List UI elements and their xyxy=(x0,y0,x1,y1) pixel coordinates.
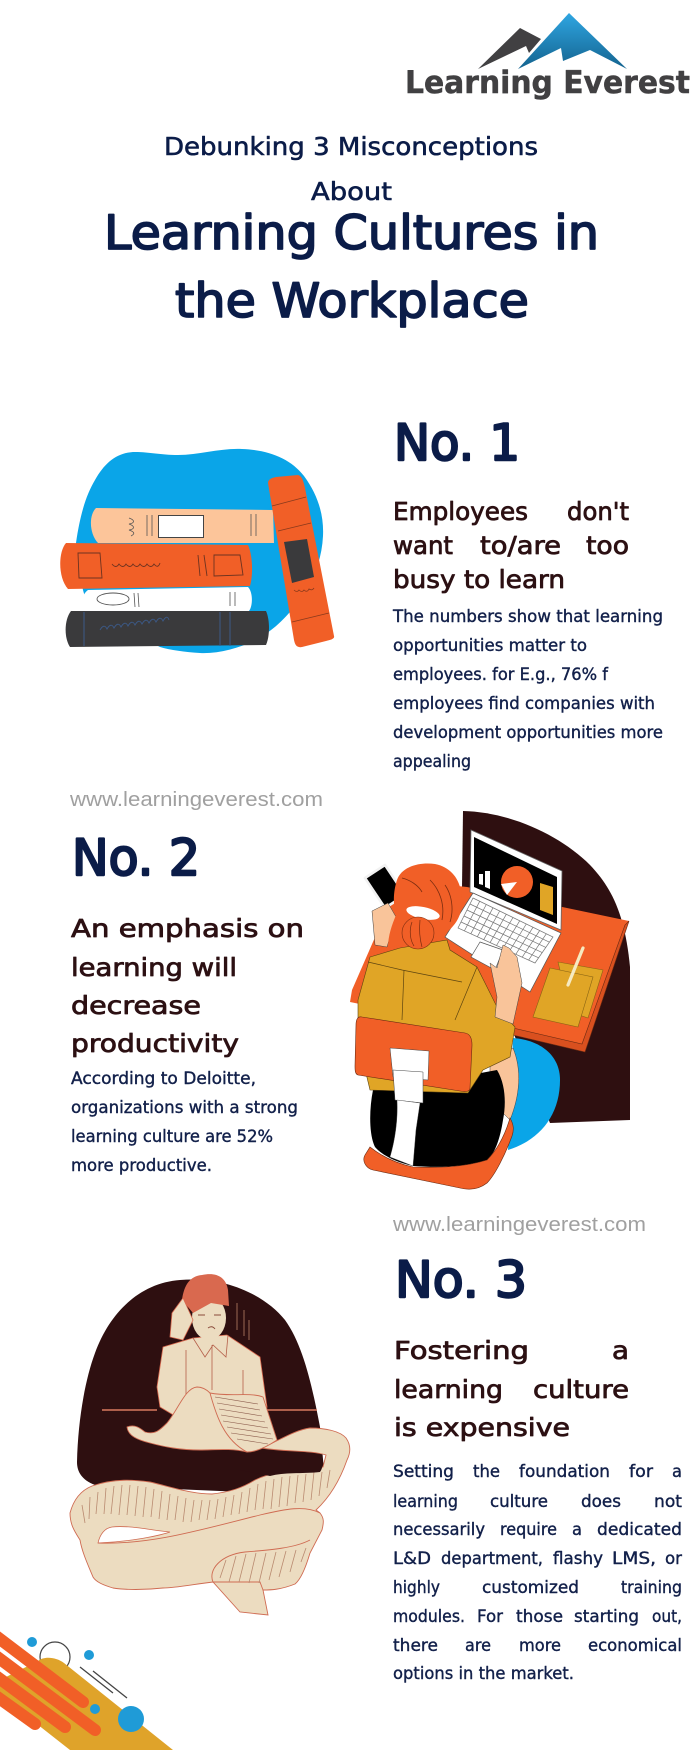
body text 3: require xyxy=(500,1520,557,1540)
body text 2: more productive. xyxy=(71,1156,212,1176)
misconception 3 xyxy=(394,1336,629,1442)
left hand xyxy=(372,903,396,947)
body text 3: learning xyxy=(393,1492,458,1512)
orange stripes xyxy=(0,1636,95,1730)
heading: No. 2: No. 2 xyxy=(72,829,200,887)
body text 1: appealing xyxy=(393,752,471,772)
chair back xyxy=(355,1017,472,1092)
scroll: back band and tail xyxy=(70,1428,350,1615)
body text 3: foundation xyxy=(519,1462,610,1482)
icon: grey mountain xyxy=(478,28,541,69)
leaning orange book xyxy=(268,475,334,647)
website url 2: www.learningeverest.com xyxy=(392,1214,646,1236)
peach book xyxy=(91,508,274,543)
misconception 3: a xyxy=(612,1336,629,1365)
blue blob xyxy=(76,449,323,653)
body text 3: out, xyxy=(652,1607,682,1627)
subtitle line 2: About xyxy=(311,177,392,206)
body text 3: For xyxy=(477,1607,503,1627)
misconception 1: too xyxy=(586,531,629,560)
keyboard grid xyxy=(458,898,553,963)
blue circle xyxy=(508,1038,560,1150)
dark parallel lines xyxy=(80,1667,127,1698)
misconception 3: is expensive xyxy=(394,1413,570,1442)
body text 2: According to Deloitte, xyxy=(71,1069,256,1089)
misconception 3: Fostering xyxy=(394,1336,529,1365)
desk xyxy=(350,880,629,1052)
hair xyxy=(182,1274,229,1313)
jacket xyxy=(358,940,515,1093)
body text 3: are xyxy=(465,1636,491,1656)
body text 1: employees. for E.g., 76% f xyxy=(393,665,609,685)
body text 3: Setting xyxy=(393,1462,454,1482)
main title line 2: the Workplace xyxy=(175,274,529,329)
body text 3: L&D xyxy=(393,1549,431,1569)
title block xyxy=(104,132,599,329)
hair xyxy=(388,864,462,949)
dark book xyxy=(66,611,269,647)
misconception 3: learning xyxy=(394,1375,503,1404)
body text 3: does xyxy=(581,1492,621,1512)
subtitle line 1: Debunking 3 Misconceptions xyxy=(164,132,538,161)
body text 3: more xyxy=(519,1636,561,1656)
misconception 2: learning will xyxy=(71,953,237,982)
jacket seams xyxy=(368,962,477,1020)
decoration: bottom-left abstract shapes xyxy=(0,1636,173,1750)
misconception 2: decrease xyxy=(71,991,201,1020)
body text 1: opportunities matter to xyxy=(393,636,587,656)
dark leg shape xyxy=(240,1452,322,1476)
body text 3: department, xyxy=(441,1549,543,1569)
heading: No. 1: No. 1 xyxy=(394,414,520,472)
section 2 text xyxy=(71,829,304,1176)
illustration: woman at laptop xyxy=(350,811,630,1189)
body text 1: employees find companies with xyxy=(393,694,655,714)
body text 3: the xyxy=(473,1462,500,1482)
logo: Learning Everest xyxy=(405,13,690,101)
white gap in scroll xyxy=(98,1527,170,1543)
body text 3: culture xyxy=(490,1492,548,1512)
body text 3: starting xyxy=(574,1607,639,1627)
chair seat xyxy=(364,1118,513,1189)
misconception 1 xyxy=(393,497,629,594)
misconception 1: busy to learn xyxy=(393,565,565,594)
body text 3: or xyxy=(665,1549,682,1569)
trackpad xyxy=(471,942,503,970)
misconception 2: An emphasis on xyxy=(71,914,304,943)
illustration: man with long paper scroll xyxy=(70,1274,350,1615)
misconception 2 xyxy=(71,914,304,1058)
misconception 1: to/are xyxy=(480,531,561,560)
body text 3: options in the market. xyxy=(393,1664,574,1684)
website url 1: www.learningeverest.com xyxy=(69,789,323,811)
face xyxy=(192,1296,226,1340)
skin of leg xyxy=(490,1048,519,1120)
shirt xyxy=(157,1335,267,1425)
body text 3: customized xyxy=(482,1578,579,1598)
body text 3: highly xyxy=(393,1578,440,1598)
body text 3: for xyxy=(629,1462,653,1482)
section 1 text xyxy=(392,414,663,772)
main title line 1: Learning Cultures in xyxy=(104,206,599,261)
body text 3: not xyxy=(654,1492,682,1512)
section 3 text xyxy=(393,1251,682,1684)
body text 3: dedicated xyxy=(597,1520,682,1540)
horizon lines xyxy=(102,1409,317,1411)
facial features xyxy=(198,1315,221,1329)
body text 3: modules. xyxy=(393,1607,465,1627)
dark arch background xyxy=(462,811,630,1123)
laptop base xyxy=(445,893,561,992)
yellow diagonal band xyxy=(0,1658,173,1750)
papers and pen xyxy=(533,948,603,1027)
body text 3: a xyxy=(672,1462,682,1482)
chair bracket xyxy=(390,1048,429,1166)
collar and shirt seams xyxy=(186,1335,243,1395)
white book xyxy=(83,587,252,611)
body text 3: a xyxy=(572,1520,582,1540)
body text 3: flashy xyxy=(553,1549,603,1569)
scroll hatch lines xyxy=(82,1470,330,1583)
body text 3 xyxy=(393,1462,682,1684)
right hand xyxy=(490,945,522,1024)
screen charts xyxy=(479,866,553,915)
scroll: sheet on lap xyxy=(127,1387,277,1452)
orange book xyxy=(60,543,252,589)
logo wordmark: Learning Everest xyxy=(405,65,690,101)
body text 3: training xyxy=(621,1578,682,1598)
body text 1: The numbers show that learning xyxy=(392,607,663,627)
body text 2: learning culture are 52% xyxy=(71,1127,273,1147)
body text 2 xyxy=(71,1069,298,1176)
motion lines xyxy=(237,1303,249,1340)
phone xyxy=(365,865,405,908)
body text 3: necessarily xyxy=(393,1520,485,1540)
dark blob background xyxy=(77,1279,324,1492)
illustration: stack of books xyxy=(60,449,334,653)
misconception 2: productivity xyxy=(71,1029,239,1058)
heading: No. 3: No. 3 xyxy=(395,1251,527,1309)
body text 1: development opportunities more xyxy=(393,723,663,743)
misconception 3: culture xyxy=(533,1375,629,1404)
black skirt xyxy=(370,1070,505,1167)
body text 3: there xyxy=(393,1636,438,1656)
scroll front band edge xyxy=(98,1509,320,1590)
icon: blue mountain xyxy=(518,13,627,69)
laptop screen xyxy=(470,830,562,930)
body text 3: those xyxy=(516,1607,563,1627)
misconception 1: Employees xyxy=(393,497,528,526)
hand at head xyxy=(170,1298,193,1340)
blue dots xyxy=(27,1637,144,1732)
misconception 1: want xyxy=(393,531,453,560)
misconception 1: don't xyxy=(567,497,629,526)
laptop xyxy=(445,830,562,992)
body text 3: LMS, xyxy=(612,1549,656,1569)
body text 1 xyxy=(392,607,663,772)
ring xyxy=(40,1642,70,1672)
body text 2: organizations with a strong xyxy=(71,1098,298,1118)
body text 3: economical xyxy=(588,1636,682,1656)
